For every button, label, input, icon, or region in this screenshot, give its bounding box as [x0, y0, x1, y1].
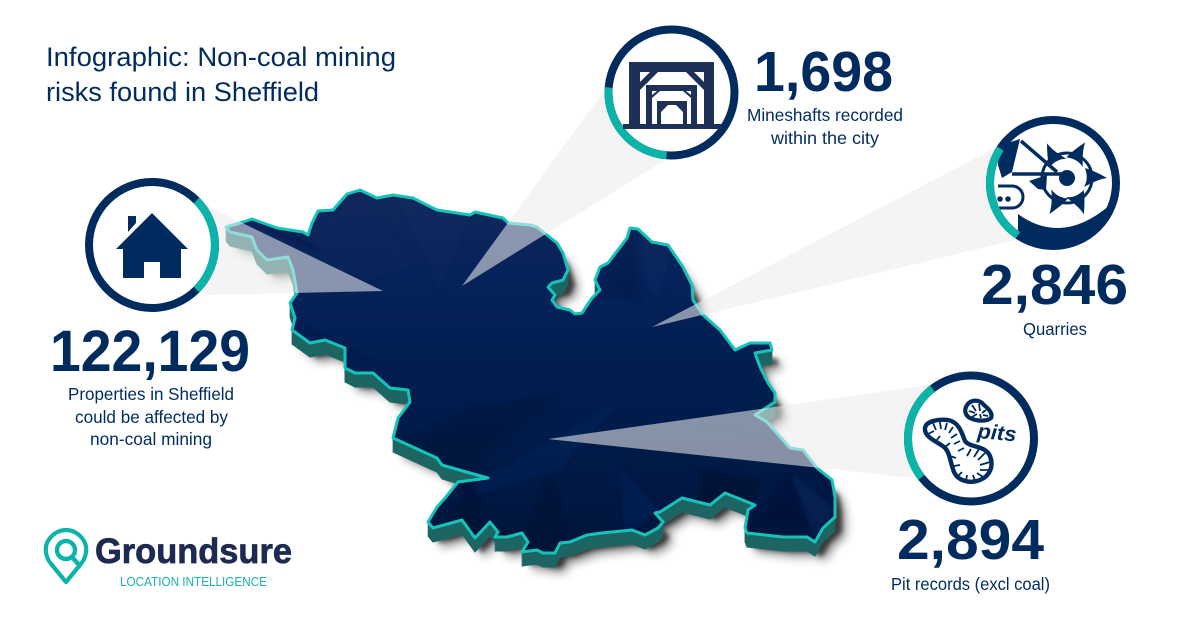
translucent beams over map [205, 88, 1015, 479]
stat: mineshafts: Mineshafts recorded [747, 105, 903, 125]
stat: quarries: 2,846 [981, 253, 1128, 317]
map extrusion [226, 192, 835, 567]
logo: Groundsure: LOCATION INTELLIGENCE [120, 574, 267, 589]
map outline [226, 190, 835, 553]
stat: properties: Properties in Sheffield [68, 384, 234, 404]
icon: pits [908, 376, 1034, 502]
icon: house [89, 182, 215, 308]
stat: properties: could be affected by [75, 407, 228, 427]
logo pin icon [46, 530, 86, 582]
icon: pits: pits [976, 420, 1017, 446]
title: risks found in Sheffield [46, 77, 319, 107]
stat: properties [50, 319, 250, 449]
map shadow [233, 205, 845, 572]
stat: properties: 122,129 [50, 319, 250, 384]
logo: Groundsure [46, 530, 292, 589]
quarry teal arc [990, 148, 1018, 235]
stat: quarries: Quarries [1023, 319, 1087, 339]
title: Infographic: Non-coal mining [46, 42, 396, 72]
stat: mineshafts [747, 40, 903, 148]
logo: Groundsure: Groundsure [95, 532, 292, 571]
stat: pits [891, 508, 1050, 594]
icon: quarry excavator [990, 120, 1116, 246]
stat: mineshafts: 1,698 [754, 40, 893, 104]
Sheffield 3D map [226, 190, 845, 572]
icon: mineshaft [608, 30, 734, 156]
light beams behind map [205, 88, 1015, 479]
stat: mineshafts: within the city [770, 128, 879, 148]
stat: properties: non-coal mining [90, 429, 212, 449]
stat: pits: 2,894 [897, 508, 1044, 572]
title [46, 42, 396, 107]
map surface [226, 190, 835, 553]
terrain facets [281, 234, 833, 536]
stat: pits: Pit records (excl coal) [891, 574, 1050, 594]
